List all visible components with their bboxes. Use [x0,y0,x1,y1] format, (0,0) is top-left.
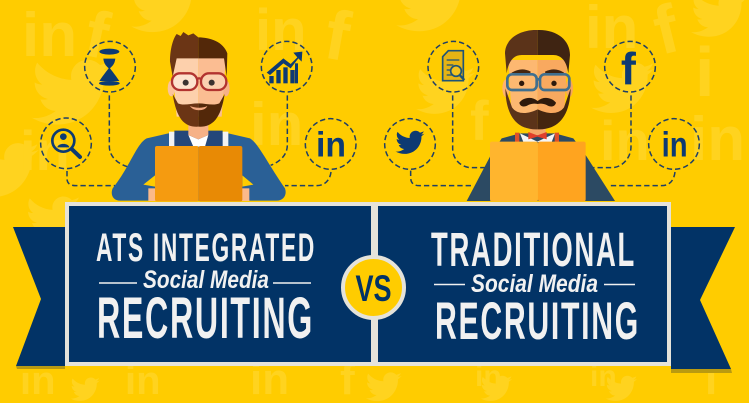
left group: recruiter with ATS icons [41,32,356,201]
background social media watermark pattern: in [125,359,161,403]
body and arms [112,133,286,201]
VS badge [343,257,404,318]
background social media watermark pattern: in [690,105,745,174]
background social media watermark pattern: i [705,355,717,403]
left dashed connectors [41,41,356,186]
neck [530,124,546,135]
beard [505,88,538,129]
background social media watermark pattern: in [250,91,303,158]
ears [502,80,510,97]
background social media watermark pattern: in [590,360,617,393]
laptop [490,142,586,201]
body [467,133,615,201]
background social media watermark pattern: in [20,119,70,182]
icon: Facebook: f [621,43,637,94]
heading: Recruiting: RECRUITING [97,286,314,351]
background social media watermark pattern: in [20,359,56,403]
background social media watermark pattern: in [22,1,77,70]
icon: LinkedIn: in [662,126,688,165]
icon: document search [443,51,464,81]
icon: Twitter bird [396,131,425,154]
laptop [155,146,242,201]
background social media watermark pattern: in [475,360,502,393]
face [508,60,538,117]
recruiter figure with glasses and beard [112,32,286,201]
icon: growth chart [267,52,302,83]
hair [505,30,538,73]
background social media watermark pattern: in [600,109,650,172]
beard [173,94,198,127]
glasses [172,73,226,90]
moustache [519,98,556,107]
right ribbon [671,227,735,373]
background social media watermark pattern: f [340,355,355,403]
icon: candidate search [52,130,80,157]
glasses [507,74,569,90]
bow tie [528,132,547,139]
heading: ATS Integrated: ATS INTEGRATED [96,226,316,270]
panel: traditional [374,202,671,366]
VS badge: VS [356,268,392,309]
subheading: Social Media: Social Media [143,266,269,294]
background social media watermark pattern: in [250,355,289,403]
icon: hourglass [99,49,120,86]
face [172,57,198,117]
background social media watermark pattern: f [470,89,489,152]
right group: recruiter with traditional icons [385,30,699,201]
panel: ATS integrated [65,202,374,366]
icon: LinkedIn: in [316,126,346,165]
subheading: Social Media: Social Media [471,270,598,298]
eyebrows [512,69,531,75]
recruiter figure with moustache [467,30,615,201]
neck [188,120,208,139]
background social media watermark pattern: i [695,33,714,111]
left ribbon [13,227,65,369]
hair [170,32,198,77]
right dashed connectors [385,41,699,186]
ears [168,80,175,96]
